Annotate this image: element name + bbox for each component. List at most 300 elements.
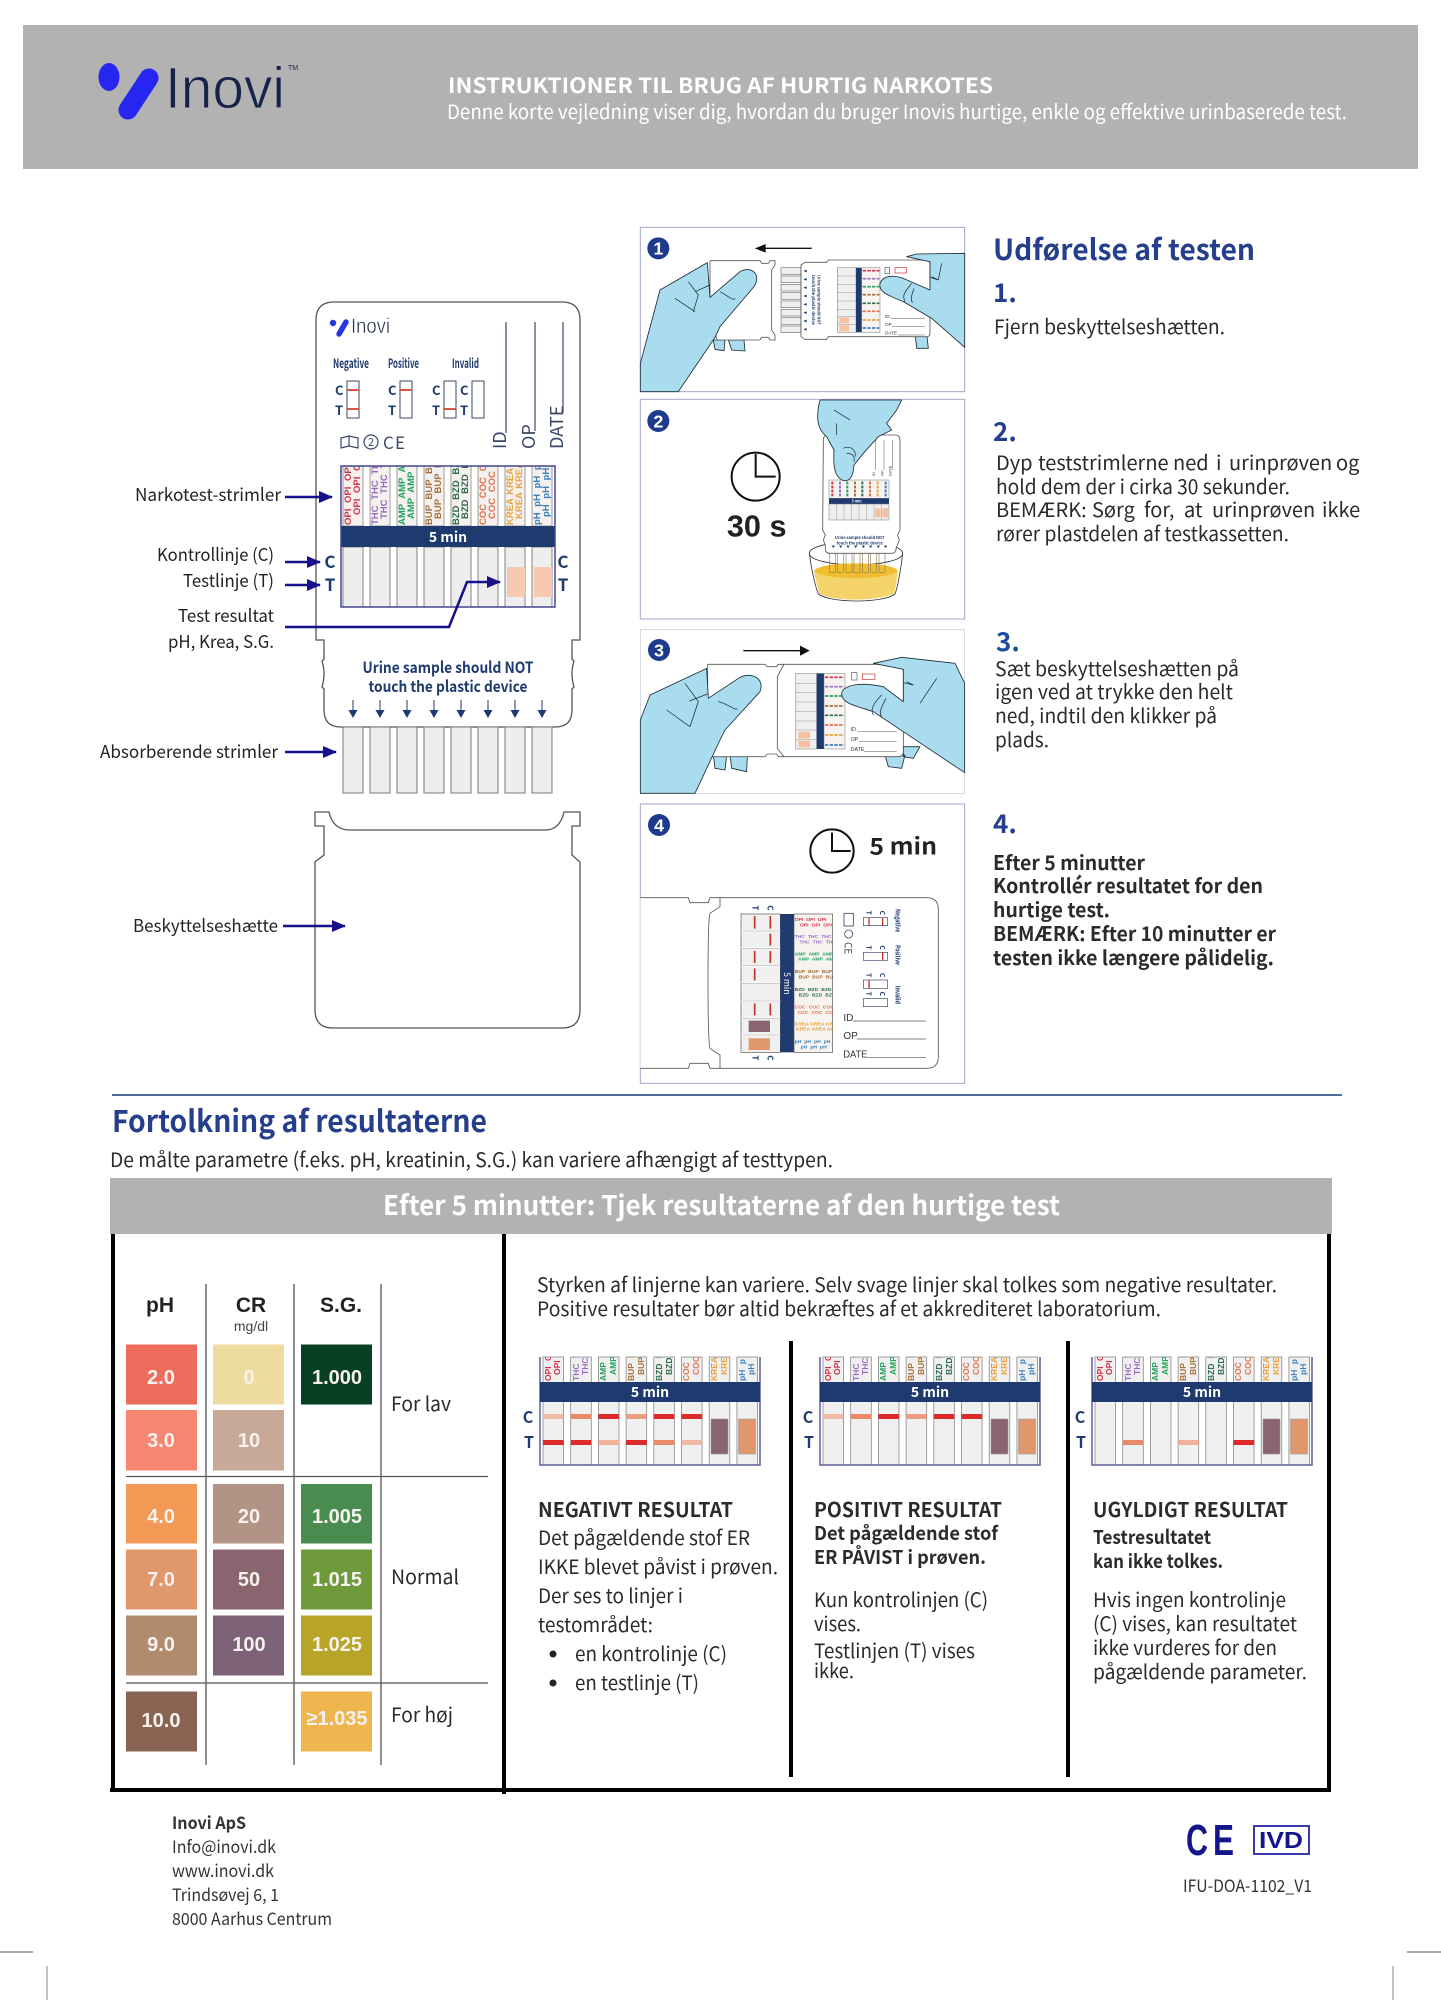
reading window: COC COC COC [478,450,489,525]
regulatory icons: 2 [368,434,374,450]
result legend: Positive [388,353,419,372]
reading window: pH pH pH pH [532,457,543,525]
result window: 5 min [781,972,793,995]
urine warning: touch the plastic device [368,675,528,697]
positive text [814,1494,1002,1684]
step 3 text: plads. [995,724,1049,753]
drug labels: KREA KREA KREA [795,1021,841,1027]
small warning: touch the plastic device [837,540,883,546]
results banner: Efter 5 minutter: Tjek resultaterne af den hurtige test [383,1184,1060,1223]
test strip: invalid: THC [1132,1358,1142,1375]
test strip: negative: OPI O [543,1354,553,1381]
reading window: C [324,548,336,573]
invalid text: kan ikke tolkes. [1093,1547,1223,1574]
label: Kontrollinje: Kontrollinje (C) [157,542,274,567]
S.G. swatches: 1.000 [312,1367,362,1389]
invalid text [1093,1494,1307,1685]
reading window: THC THC THC [379,449,390,519]
C T letters [1075,1404,1086,1453]
drug labels: COC COC COC [795,1005,834,1011]
C T letters: T [1076,1429,1086,1453]
range labels [391,1388,459,1728]
test strip: positive: THC T [851,1352,861,1381]
note text: Positive resultater bør altid bekræftes af et akkrediteret laboratorium. [537,1293,1161,1322]
C T letters [803,1404,814,1453]
result legend: T [388,400,396,419]
test strip: invalid: AMP [1160,1356,1170,1375]
test strip: negative: COC [691,1356,701,1375]
test strip: negative: BZD B [654,1352,664,1381]
label: Test resultat: pH, Krea, S.G. [168,629,274,654]
results frame [110,1234,1331,1794]
test strip: invalid: pH p [1289,1359,1299,1381]
step 1 text: 1. [993,273,1017,310]
legend right: C [878,945,888,950]
icon: Inovi logo: TM [288,65,298,72]
absorbent strips [781,268,801,333]
negative text: en kontrolinje (C) [575,1638,727,1667]
window [829,480,889,520]
icon: clock 5 min [810,827,937,873]
negative text: en testlinje (T) [575,1667,699,1696]
test strip: positive: KREA [999,1351,1009,1375]
CR swatches: 0 [243,1367,255,1389]
CE mark [1186,1816,1234,1865]
test strip: negative: 5 min [631,1382,669,1402]
panel: test instructions text [993,227,1360,971]
icon: small Inovi logo: Inovi [351,315,390,338]
step 1 text [993,273,1225,340]
invalid text: Testresultatet [1093,1523,1211,1550]
step 2 text: ikke [1322,494,1360,523]
test strip: positive: AMP A [878,1351,888,1381]
document code: IFU-DOA-1102_V1 [1183,1872,1312,1897]
intro text: De målte parametre (f.eks. pH, kreatinin, S.G.) kan variere afhængigt af testtypen. [110,1144,833,1173]
reading window: KREA KREA KREA [514,432,525,519]
reading window: BZD BZD BZD [460,449,471,519]
result legend: Negative [333,353,369,372]
cassette with cap [640,898,938,1068]
field labels: DATE [851,747,865,753]
test strip: positive [820,1345,1040,1465]
test strip: positive: KREA K [989,1345,999,1381]
step 2 text: i [1216,447,1222,476]
test strip: invalid: OPI O [1095,1354,1105,1381]
panel: invalid result [1075,1345,1312,1685]
reading window: pH pH pH pH [541,449,552,517]
invalid text: pågældende parameter. [1093,1656,1307,1685]
step 2 text: og [1336,447,1359,476]
invalid text: UGYLDIGT RESULTAT [1093,1494,1288,1523]
drug labels: BZD BZD BZD [795,987,832,993]
step 4 text [993,804,1276,971]
note text: Styrken af linjerne kan variere. Selv svage linjer skal tolkes som negative resultater. [537,1269,1277,1298]
urine warning [362,656,534,697]
invalid text: Hvis ingen kontrolinje [1093,1584,1286,1613]
pH swatches: 10.0 [142,1710,180,1732]
CE mark: C [1186,1816,1208,1865]
test strip: invalid: BUP [1188,1357,1198,1375]
negative text [538,1494,778,1696]
lower fingers [713,747,920,772]
footer contact [172,1809,332,1930]
step number [647,410,669,432]
positive text: ikke. [814,1655,854,1684]
result legend [333,353,484,419]
result legend: T [432,400,440,419]
icon: clock 30 s: 30 s [727,510,787,544]
step 3 text: 3. [996,622,1020,659]
CR swatches: 50 [238,1569,260,1591]
field lines: DATE [888,465,893,476]
reading window [325,465,568,608]
test strip: positive: BUP [916,1357,926,1375]
step 3 text: ned, indtil den klikker på [995,700,1217,729]
legend right: C [878,992,888,997]
invalid text: ikke vurderes for den [1093,1632,1277,1661]
drug labels [794,918,833,1050]
field labels: ID [885,314,890,319]
range labels: For høj [391,1699,453,1728]
step 2 text: BEMÆRK: [996,494,1087,523]
panel: test cassette diagram: ID [486,431,512,449]
reading window: KREA KREA KREA [505,438,516,525]
IVD mark: IVD [1259,1827,1303,1853]
cassette body [316,302,580,727]
drug labels: BUP BUP BUP [795,969,833,975]
label: Beskyttelseshætte: Beskyttelseshætte [133,913,278,938]
test strip: positive: 5 min [911,1382,949,1402]
step 2 text: for, [1144,494,1174,523]
device window [837,268,880,332]
range labels: For lav [391,1388,452,1417]
step 4 text: hurtige test. [993,894,1110,923]
result legend: C [460,380,469,399]
test strip: invalid [1092,1345,1312,1465]
test strip: invalid: KREA [1271,1351,1281,1375]
step 4 text: testen ikke længere pålidelig. [993,942,1274,971]
test strip: negative: BUP [636,1357,646,1375]
step 2 text: rører plastdelen af testkassetten. [996,518,1289,547]
panel: step 1 illustration [640,227,965,392]
test strip: invalid: BZD [1216,1358,1226,1375]
test strip: negative: AMP A [598,1351,608,1381]
test strip: negative [540,1345,760,1465]
T C markers [750,905,776,1061]
drug labels: THC THC TH [799,939,833,945]
result legend: T [335,400,343,419]
negative text: Der ses to linjer i [538,1580,683,1609]
step number [648,814,670,836]
CE mark: E [1213,1816,1234,1865]
C T letters: T [804,1429,814,1453]
panel: test cassette diagram: DATE [543,406,569,449]
legend right: Positive [893,945,903,965]
CR swatches: 10 [238,1430,260,1452]
field labels: OP [885,322,892,327]
negative text: IKKE blevet påvist i prøven. [538,1551,778,1580]
rotated warning: Urine sample should NOT [815,275,821,325]
urine cup [814,564,898,600]
cassette [801,260,930,339]
table headers [146,1294,362,1334]
step number: 3 [654,640,664,660]
step 2 text: 2. [993,412,1017,449]
panel: positive result [803,1345,1040,1684]
positive text: POSITIVT RESULTAT [814,1494,1002,1523]
reading window: T [558,571,569,596]
result legend: C [432,380,441,399]
step 2 text: Sørg [1092,494,1135,523]
test strip: invalid: KREA K [1261,1345,1271,1381]
footer contact: Inovi ApS [172,1809,246,1834]
icon: Inovi logo [98,56,298,121]
step 4 text: BEMÆRK: Efter 10 minutter er [993,918,1276,947]
step 2 text: at [1184,494,1203,523]
reading window: 5 min [429,527,467,547]
drug labels: KREA KREA KR [796,1027,835,1033]
table headers: pH [146,1294,174,1317]
cassette [777,664,903,757]
note text [537,1269,1277,1322]
test strip: negative: BUP B [626,1352,636,1381]
header title: INSTRUKTIONER TIL BRUG AF HURTIG NARKOTES [448,70,993,100]
positive text: vises. [814,1608,861,1637]
cap [710,261,775,340]
panel: step 4 illustration [640,804,965,1083]
cap [708,664,784,757]
field labels [885,268,925,336]
C T letters: T [524,1429,534,1453]
label: Test resultat [168,582,500,654]
drug labels: AMP AMP AM [798,957,833,963]
table headers: S.G. [320,1294,362,1317]
pH swatches: 4.0 [147,1506,175,1528]
step number [647,237,669,259]
arrow left [757,245,812,252]
invalid text: (C) vises, kan resultatet [1093,1608,1297,1637]
heading: Fortolkning af resultaterne: Fortolkning af resultaterne [112,1097,487,1141]
test strip: negative: BZD [664,1358,674,1375]
positive text: ER PÅVIST i prøven. [814,1543,986,1570]
step 3 text: igen ved at trykke den helt [995,676,1233,705]
test strip: positive: pH [1026,1364,1036,1375]
test strip: invalid: AMP A [1150,1351,1160,1381]
urine warning: Urine sample should NOT [362,656,534,678]
panel: negative result [523,1345,778,1696]
reading window: BUP BUP BUP [433,447,444,519]
legend right: C [878,911,888,916]
field labels: OP [851,737,859,743]
pH swatches: 3.0 [147,1430,175,1452]
drug labels: pH pH pH pH [795,1039,831,1045]
label: Narkotest-strimler: Narkotest-strimler [135,482,281,507]
reading window: C [557,548,569,573]
test strip: invalid: THC T [1123,1352,1133,1381]
icon: Inovi logo: Inovi [165,56,285,121]
small warning [832,535,887,548]
cassette upright [823,435,900,553]
S.G. swatches [301,1344,372,1752]
footer contact: 8000 Aarhus Centrum [172,1905,332,1930]
ID OP DATE lines: OP [843,1031,858,1042]
reading window: BZD BZD BZD [451,455,462,525]
step 2 text: Dyp [996,447,1033,476]
reading window: COC COC COC [487,444,498,519]
CR swatches [213,1344,284,1676]
step 3 text [995,622,1239,753]
T C markers: C [765,1055,776,1061]
heading: Udførelse af testen: Udførelse af testen [993,227,1255,269]
result legend: C [388,380,397,399]
test strip: invalid: COC [1243,1356,1253,1375]
header banner [23,25,1418,169]
step number [648,639,670,661]
left hand [640,263,757,392]
icon: small Inovi logo [330,315,390,338]
table grid [126,1284,488,1765]
window [796,673,845,749]
test strip: positive: BZD [944,1358,954,1375]
T C markers: C [765,905,776,911]
field labels: DATE [885,331,897,336]
panel: test cassette diagram [100,302,580,1028]
legend right: T [865,973,875,977]
footer contact: Info@inovi.dk [172,1833,277,1858]
field labels: ID [851,727,856,733]
table headers: mg/dl [234,1318,268,1334]
icon: down arrows [348,700,546,718]
legend right: C [878,973,888,978]
test strip: positive: BZD B [934,1352,944,1381]
reading window: OPI OPI OPI [352,455,363,515]
field lines: ID [871,472,876,476]
rotated warning: touch the plastic device [810,275,816,326]
regulatory icons: CE [383,429,405,454]
icon: clock 30 s [727,453,787,544]
test strip: negative: KREA K [709,1345,719,1381]
test strip: negative: KREA [719,1351,729,1375]
positive text: Det pågældende stof [814,1519,999,1546]
table headers: CR [236,1294,266,1317]
cup back [809,542,903,565]
test strip: invalid: COC C [1233,1351,1243,1381]
pH swatches: 7.0 [147,1569,175,1591]
ID OP DATE lines: ID [843,1013,853,1024]
step 1 text: Fjern beskyttelseshætten. [994,311,1225,340]
panel: step 3 illustration [640,629,965,793]
positive text: Testlinjen (T) vises [814,1635,975,1664]
panel: step 2 illustration [640,399,965,619]
T C markers: T [750,905,761,910]
reading window: THC THC THC [370,455,381,525]
result legend: Invalid [452,353,479,372]
header subtitle: Denne korte vejledning viser dig, hvordan du bruger Inovis hurtige, enkle og effektive urinbaserede test. [447,96,1347,125]
IVD mark [1254,1826,1309,1854]
step 2 text: urinprøven [1229,447,1332,476]
legend right: T [865,911,875,915]
step 2 text: hold dem der i cirka 30 sekunder. [996,471,1290,500]
test strip: negative: THC T [571,1352,581,1381]
label: Testlinje: Testlinje (T) [183,568,274,593]
step 4 text: Kontrollér resultatet for den [993,870,1263,899]
test strip: invalid: pH [1298,1364,1308,1375]
protective cap [315,812,580,1028]
test strip: invalid: 5 min [1183,1382,1221,1402]
result legend: T [460,400,468,419]
reading window: T [325,571,336,596]
test strip: negative: AMP [608,1356,618,1375]
negative text: testområdet: [538,1609,653,1638]
panel: colour reference table [126,1284,488,1765]
test strip: invalid: BZD B [1206,1352,1216,1381]
legend right: CE [842,942,857,954]
step number: 1 [653,239,663,259]
negative text: Det pågældende stof ER [538,1522,750,1551]
rotated warning [803,270,821,331]
step 3 text: Sæt beskyttelseshætten på [995,653,1239,682]
reading window: AMP AMP AMP [397,451,408,525]
test strip: positive: pH p [1017,1359,1027,1381]
dipped strips [829,550,885,572]
ID OP DATE lines: DATE [843,1050,868,1061]
test strip: negative: OPI [552,1360,562,1375]
ID OP DATE fields [506,322,563,433]
CR swatches: 20 [238,1506,260,1528]
field labels [851,673,897,753]
legend right: Invalid [893,986,903,1004]
test strip: positive: COC [971,1356,981,1375]
test strip: positive: COC C [961,1351,971,1381]
result legend: C [335,380,344,399]
CR swatches: 100 [232,1634,266,1656]
C T letters: C [803,1404,814,1428]
S.G. swatches: 1.005 [312,1506,362,1528]
label: Test resultat: Test resultat [178,603,274,628]
C T letters: C [1075,1404,1086,1428]
step 4 text: Efter 5 minutter [993,847,1145,876]
result window [741,914,833,1052]
step 2 text: teststrimlerne [1038,447,1169,476]
drug labels: BZD BZD BZ [799,992,832,998]
ID OP DATE lines [843,1013,926,1061]
S.G. swatches: 1.015 [312,1569,362,1591]
panel: test cassette diagram: OP [515,424,541,449]
S.G. swatches: 1.025 [312,1634,362,1656]
right hand [880,253,965,347]
test strip: positive: AMP [888,1356,898,1375]
negative text: NEGATIVT RESULTAT [538,1494,733,1523]
right fingers [915,333,928,348]
test strip: positive: BUP B [906,1352,916,1381]
test strip: negative: COC C [681,1351,691,1381]
C T letters [523,1404,534,1453]
left hand fingers [713,340,745,351]
range labels: Normal [391,1561,459,1590]
legend right [842,909,903,1007]
window: 5 min [852,499,862,505]
C T letters: C [523,1404,534,1428]
legend right: T [865,945,875,950]
regulatory icons [341,429,405,454]
test strip: invalid: BUP B [1178,1352,1188,1381]
step 2 text: ned [1173,447,1209,476]
left hand [640,668,761,793]
step number: 2 [653,411,663,431]
reading window: AMP AMP AMP [406,445,417,519]
arrow right [743,647,808,655]
legend right: Negative [893,909,903,932]
